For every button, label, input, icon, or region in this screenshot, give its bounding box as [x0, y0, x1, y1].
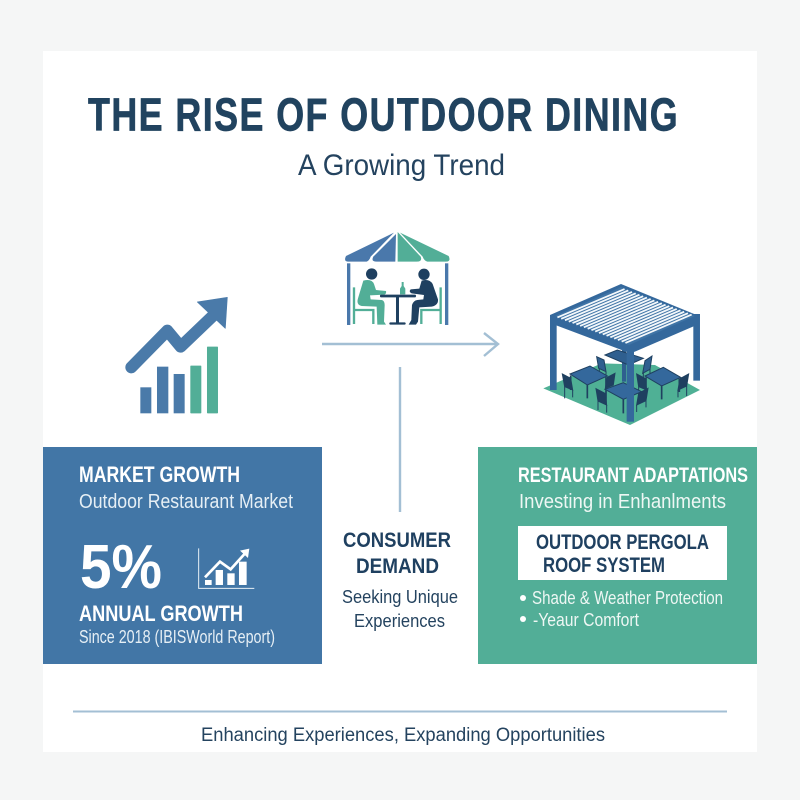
stat: 5%: 5%	[80, 533, 162, 602]
subtitle: A Growing Trend	[298, 149, 505, 182]
panel: market growth	[43, 447, 322, 664]
text block: consumer demand: DEMAND	[356, 555, 439, 578]
subheading: outdoor restaurant market: Outdoor Restaurant Market	[79, 491, 293, 513]
label: annual growth: ANNUAL GROWTH	[79, 601, 243, 626]
bullet list: Shade & Weather Protection	[532, 588, 723, 608]
icon: mini growth chart	[199, 548, 254, 588]
callout: pergola roof system	[518, 526, 727, 580]
icon: diners under umbrella	[345, 232, 450, 325]
arrow: horizontal flow	[322, 333, 498, 356]
footer tagline: Enhancing Experiences, Expanding Opportunities	[201, 725, 605, 746]
callout: pergola roof system: OUTDOOR PERGOLA	[536, 531, 709, 554]
icon: pergola with tables	[543, 284, 700, 425]
heading: market growth: MARKET GROWTH	[79, 462, 240, 487]
bullet list	[520, 588, 723, 630]
text block: consumer demand: CONSUMER	[343, 529, 451, 552]
text block: consumer demand: Experiences	[354, 611, 445, 631]
source note: Since 2018 (IBISWorld Report)	[79, 627, 275, 647]
icon: rising growth chart	[131, 297, 227, 413]
panel: restaurant adaptations	[478, 447, 757, 664]
pergola base and furniture	[543, 314, 700, 425]
callout: pergola roof system: ROOF SYSTEM	[543, 554, 665, 577]
title: THE RISE OF OUTDOOR DINING	[88, 89, 678, 141]
pergola roof	[550, 284, 699, 352]
text block: consumer demand: Seeking Unique	[342, 587, 458, 607]
text block: consumer demand	[342, 529, 458, 631]
subheading: investing: Investing in Enhanlments	[519, 491, 726, 513]
bullet list: -Yeaur Comfort	[533, 610, 639, 630]
arrow: vertical connector	[399, 367, 401, 512]
